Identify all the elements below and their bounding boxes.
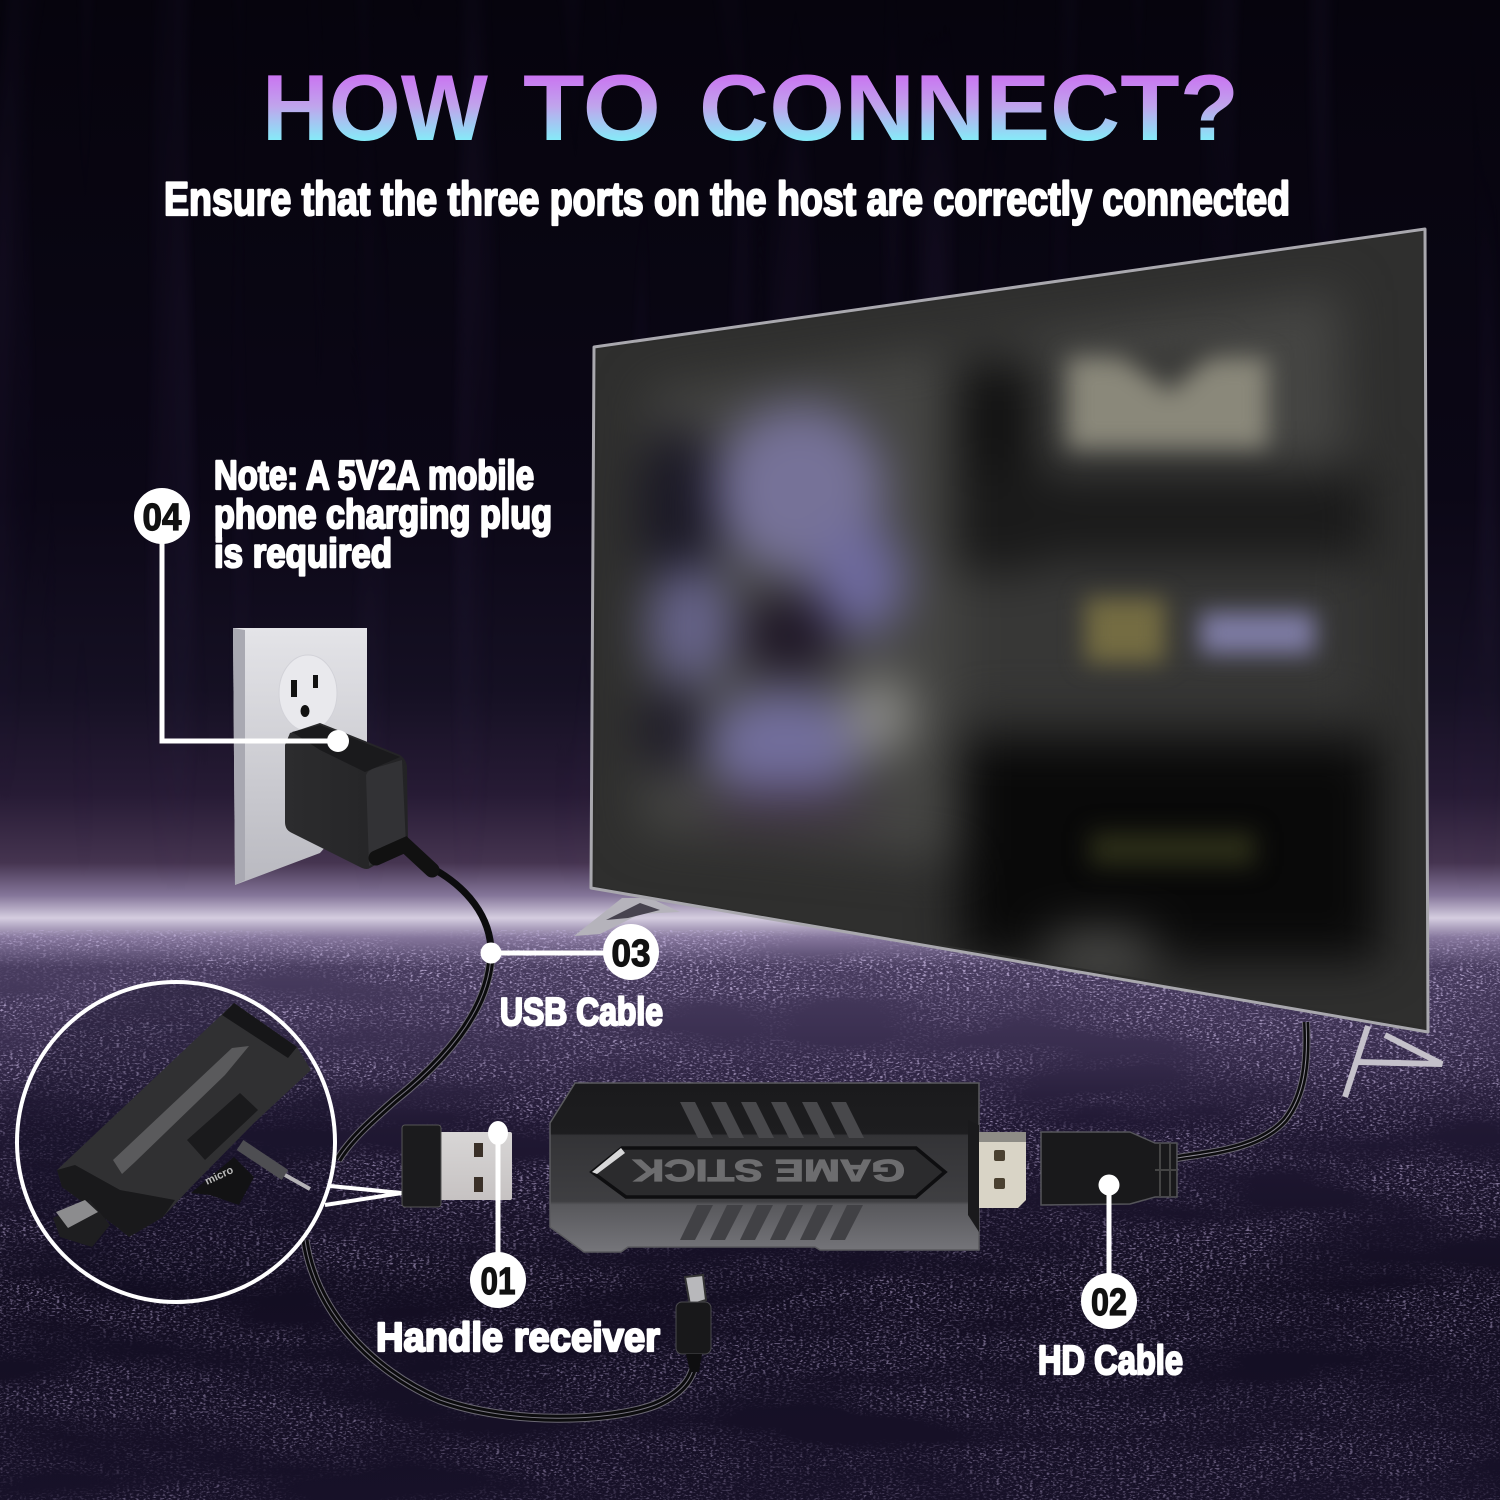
product name: GAME STICK bbox=[632, 1153, 905, 1188]
callout 02: 02 bbox=[1091, 1282, 1127, 1324]
left stand bbox=[574, 898, 680, 936]
title: HOW bbox=[262, 55, 488, 160]
USB-C plug bbox=[676, 1275, 711, 1372]
callout 03 bbox=[480, 924, 659, 980]
HDMI cable connector bbox=[1041, 1132, 1177, 1205]
callout 04: 04 bbox=[142, 497, 182, 539]
note text bbox=[214, 452, 552, 576]
label: USB Cable: USB Cable bbox=[500, 991, 663, 1034]
title bbox=[262, 55, 1239, 160]
label plate bbox=[592, 1148, 945, 1197]
bottom slats bbox=[680, 1205, 863, 1240]
connector bbox=[53, 1212, 110, 1247]
callout 03: 03 bbox=[612, 933, 650, 975]
callout 01 bbox=[470, 1121, 526, 1308]
note text: phone charging plug bbox=[214, 491, 552, 537]
label: Handle receiver: Handle receiver bbox=[376, 1314, 660, 1360]
blurred screen content bbox=[616, 284, 1396, 976]
callout 02 bbox=[1081, 1174, 1137, 1329]
game stick bbox=[550, 1083, 979, 1252]
title: CONNECT? bbox=[699, 55, 1239, 160]
HDMI male plug bbox=[979, 1132, 1026, 1208]
callout 01: 01 bbox=[480, 1261, 516, 1303]
right stand bbox=[1345, 1026, 1442, 1097]
screen frame bbox=[591, 229, 1428, 1032]
HD cable to television bbox=[1177, 1022, 1307, 1158]
USB cable bbox=[305, 862, 696, 1418]
note text: is required bbox=[214, 530, 392, 576]
lens circle with stick detail bbox=[17, 982, 402, 1302]
top slats bbox=[680, 1102, 864, 1138]
television with blurred screen bbox=[574, 225, 1442, 1097]
handle receiver USB dongle bbox=[402, 1125, 512, 1207]
callout 04 bbox=[134, 488, 349, 752]
title: TO bbox=[523, 55, 661, 160]
wall outlet bbox=[233, 628, 367, 885]
lens circle with stick detail: micro bbox=[203, 1164, 236, 1188]
charger plug bbox=[285, 723, 432, 870]
label: HD Cable: HD Cable bbox=[1038, 1337, 1183, 1383]
note text: Note: A 5V2A mobile bbox=[214, 452, 534, 498]
